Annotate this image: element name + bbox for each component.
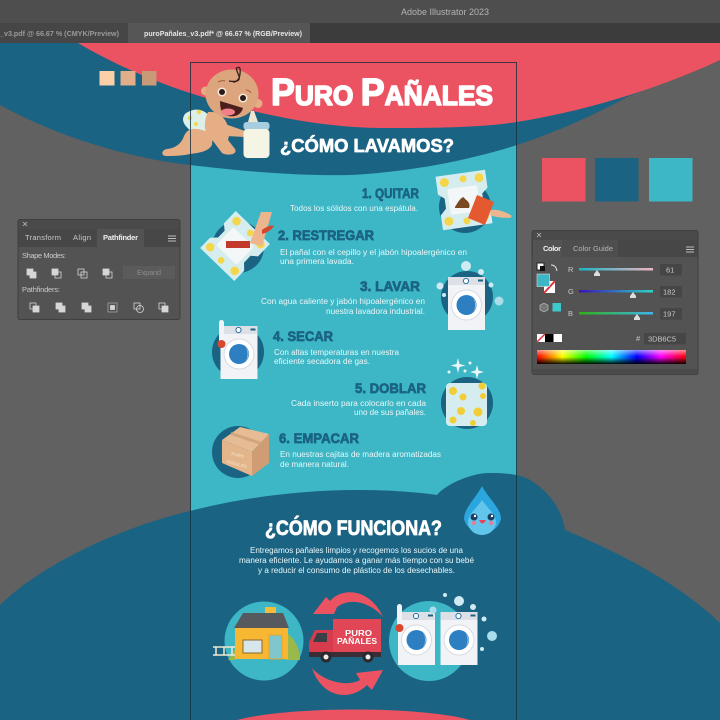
coral top wave [78,43,720,128]
panel menu icon [686,247,694,252]
truck logo: PAÑALES [337,637,378,646]
step text: de manera natural. [280,460,349,469]
step heading: 6. EMPACAR [279,430,359,446]
color tab labels: Color [543,244,561,253]
color panel [532,230,698,374]
application title bar [0,0,720,23]
icon: dryer with thermometer [212,320,264,379]
RGB sliders: B [568,309,573,318]
baby illustration [162,67,270,158]
step heading: 1. QUITAR [362,185,419,201]
icon: cardboard box: PURO [231,451,245,459]
brows [218,81,251,93]
dark teal bottom wave [0,473,720,720]
RGB sliders: G [568,287,574,296]
step text: Con altas temperaturas en nuestra [274,348,400,357]
step text: En nuestras cajitas de madera aromatizadas [280,450,441,459]
expand button [123,266,175,279]
step text: nuestra lavadora industrial. [326,307,425,316]
dark teal top wave [0,43,720,175]
inactive tab label: _v3.pdf @ 66.67 % (CMYK/Preview) [0,29,119,38]
hex field: # [636,334,641,343]
shape mode icons [27,269,112,278]
expand button: Expand [137,268,161,277]
arm to bottle [225,124,245,137]
step text: Cada inserto para colocarlo en cada [291,399,427,408]
color tab labels: Color Guide [573,244,613,253]
brand colour swatches [542,158,692,202]
title: PURO PAÑALES [271,72,493,114]
truck logo: PURO [345,629,372,638]
how it works paragraph: manera eficiente. Le ayudamos a ganar más tiempo con su bebé [239,556,475,565]
step 6 [212,426,441,478]
icon: folded diaper with sparkles [441,358,493,429]
ears [201,86,210,96]
close icon [537,233,541,237]
panel tabs [25,233,138,242]
icon: cardboard box: PAÑALES [226,458,248,469]
icon: delivery truck [309,619,381,662]
artboard outline [190,62,516,720]
shape modes label: Shape Modes: [22,251,66,260]
step text [274,348,400,366]
fill colour swatch [537,274,550,286]
head [206,70,258,118]
step text: El pañal con el cepillo y el jabón hipoalergénico en [280,248,467,257]
step heading: 5. DOBLAR [355,380,426,396]
how it works paragraph: Entregamos pañales limpios y recogemos los sucios de una [250,546,464,555]
step text [291,399,427,417]
step 2 [200,211,467,281]
step text: Todos los sólidos con una espátula. [290,204,418,213]
how it works paragraph: y a reducir el consumo de plástico de los desechables. [258,566,455,575]
step 1 [290,170,512,233]
skin colour swatches [100,71,156,86]
RGB sliders: 61 [666,266,674,274]
none black white chips [537,334,562,342]
icon: diaper and scrub hand [200,211,274,281]
step heading: 4. SECAR [273,328,333,344]
step text [280,450,441,469]
diaper [183,110,212,142]
arrow: bottom return [312,668,383,695]
step text [280,248,467,266]
close icon [23,222,27,226]
hex field: 3DB6C5 [648,334,676,344]
truck logo [337,629,378,646]
icon: house [213,602,304,680]
RGB sliders: R [568,265,574,274]
app title: Adobe Illustrator 2023 [401,7,489,17]
step text: eficiente secadora de gas. [274,357,370,366]
colour spectrum [537,350,686,364]
icon: water drop mascot [464,486,501,535]
panel tabs: Transform [25,233,61,242]
torso and front arm [205,112,236,155]
panel menu icon [168,236,176,241]
step text: una primera lavada. [280,257,354,266]
icon: washing machine with bubbles [436,261,504,330]
color tab labels [543,244,613,253]
step text [261,297,425,316]
back leg [162,129,212,156]
icon: diaper and spatula [435,170,512,233]
RGB sliders: 197 [663,310,676,318]
step 5 [291,358,493,429]
document tabs [0,23,720,43]
hair curl [229,67,240,82]
step heading: 2. RESTREGAR [278,227,374,243]
step heading: 3. LAVAR [360,278,420,294]
eyes [218,88,248,102]
pathfinders label: Pathfinders: [22,285,60,294]
active tab label: puroPañales_v3.pdf* @ 66.67 % (RGB/Preview) [144,29,302,38]
pathfinder panel [18,220,180,320]
step 3 [261,261,504,330]
icon: cardboard box [212,426,269,478]
gamut cube icon [540,303,548,312]
coral bottom shape [237,710,470,720]
mouth [220,101,243,116]
panel tabs: Pathfinder [103,233,138,242]
web safe swatch [552,303,561,312]
RGB sliders: 182 [663,288,676,296]
step text: uno de sus pañales. [354,408,426,417]
panel tabs: Align [73,233,91,242]
arrow: top return [313,592,383,617]
icon: washing machines [389,593,497,681]
stroke none swatch [544,281,555,293]
default fill stroke icons [537,263,557,271]
hex field [636,333,686,344]
artboard cyan background [191,130,517,530]
how it works paragraph [239,546,475,575]
heading: como lavamos: ¿CÓMO LAVAMOS? [280,135,454,156]
RGB sliders [568,264,682,320]
step text: Con agua caliente y jabón hipoalergénico en [261,297,425,306]
heading: como funciona: ¿CÓMO FUNCIONA? [265,516,442,540]
bottle [244,111,270,158]
pathfinder icons [30,303,168,312]
step 4 [212,320,400,379]
